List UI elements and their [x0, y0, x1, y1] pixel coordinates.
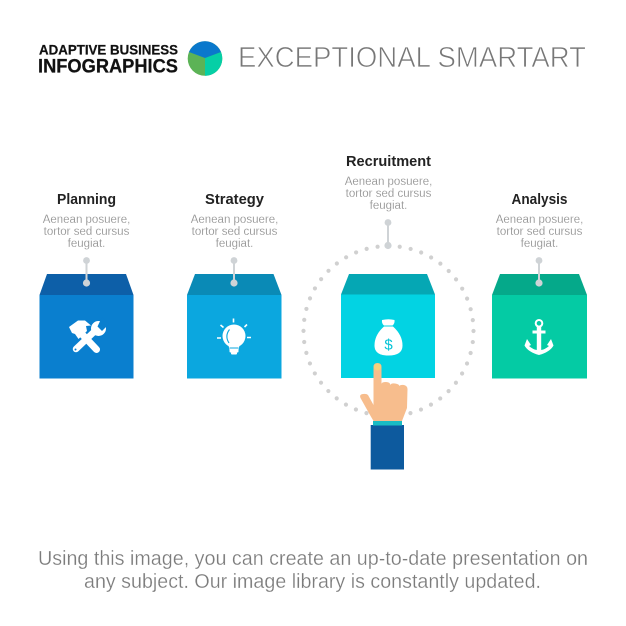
icon: hammer and wrench	[69, 317, 109, 350]
fingernail	[374, 363, 381, 371]
header logo text	[38, 42, 178, 78]
panel: recruitment	[341, 154, 435, 378]
title: EXCEPTIONAL SMARTART	[238, 42, 586, 74]
heading: analysis: Analysis	[512, 192, 568, 208]
description: strategy: Aenean posuere,	[191, 214, 278, 226]
dotted circle	[304, 246, 474, 416]
pin: planning	[83, 257, 90, 287]
description: recruitment: Aenean posuere,	[345, 176, 432, 188]
description: recruitment: tortor sed cursus	[346, 188, 432, 200]
box: strategy	[187, 274, 282, 378]
icon: pointing hand	[360, 363, 408, 470]
hand	[360, 363, 408, 421]
panel: strategy	[187, 192, 282, 378]
description: recruitment: feugiat.	[370, 200, 407, 212]
box: planning	[40, 274, 134, 378]
header logo text: ADAPTIVE BUSINESS	[39, 42, 178, 58]
box: recruitment	[341, 274, 435, 378]
description: analysis: tortor sed cursus	[497, 226, 583, 238]
description: planning: tortor sed cursus	[44, 226, 130, 238]
panel: analysis	[492, 192, 587, 378]
icon: light bulb	[217, 318, 251, 354]
description: strategy: feugiat.	[216, 238, 253, 250]
description: analysis: Aenean posuere,	[496, 214, 583, 226]
bottom text block	[38, 548, 588, 593]
cuff	[373, 421, 402, 426]
description: planning: Aenean posuere,	[43, 214, 130, 226]
pin: analysis	[535, 257, 543, 287]
heading: recruitment: Recruitment	[346, 154, 431, 170]
icon: logo pie	[188, 41, 222, 76]
pin: strategy	[230, 257, 238, 287]
panel: planning	[40, 192, 134, 378]
header logo text: INFOGRAPHICS	[38, 56, 178, 78]
description: analysis: feugiat.	[521, 238, 558, 250]
pin: recruitment	[384, 219, 392, 249]
box: analysis	[492, 274, 587, 378]
bottom text block: Using this image, you can create an up-to-date presentation on	[38, 548, 588, 570]
sleeve	[371, 425, 404, 470]
description: strategy: tortor sed cursus	[192, 226, 278, 238]
icon: money bag	[374, 319, 402, 356]
heading: strategy: Strategy	[205, 192, 264, 208]
heading: planning: Planning	[57, 192, 116, 208]
bottom text block: any subject. Our image library is constantly updated.	[84, 571, 541, 593]
description: planning: feugiat.	[68, 238, 105, 250]
icon: anchor	[524, 320, 554, 355]
icon: money bag: $	[384, 336, 393, 354]
